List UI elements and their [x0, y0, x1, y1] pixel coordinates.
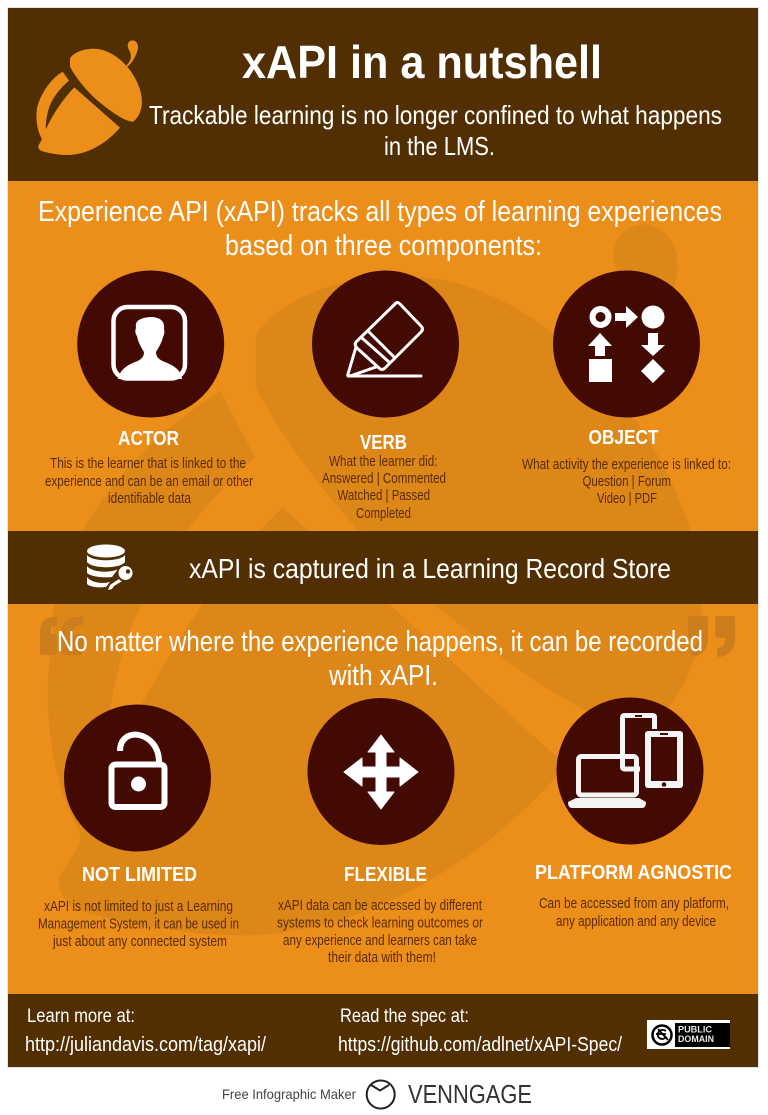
intro heading: [38, 196, 722, 262]
panel: object: [522, 270, 731, 507]
heading: verb: VERB: [360, 432, 407, 454]
text: spec link: Read the spec at:: [340, 1006, 469, 1027]
icon: public domain badge: [647, 1020, 730, 1049]
text: learn more link: http://juliandavis.com/tag/xapi/: [25, 1034, 266, 1056]
panel: not limited: [38, 704, 239, 950]
text: verb description: [322, 454, 446, 522]
text: object description: Question | Forum: [582, 474, 671, 490]
text: flexible description: any experience and learners can take: [283, 933, 477, 949]
text: verb description: Watched | Passed: [338, 488, 430, 504]
heading: platform agnostic: PLATFORM AGNOSTIC: [535, 862, 732, 884]
band: learning record store: [8, 531, 758, 604]
footer band: [8, 994, 758, 1067]
icon: acorn: [36, 40, 142, 155]
quote heading: [57, 626, 703, 692]
text: platform agnostic description: Can be accessed from any platform,: [539, 896, 729, 912]
text: object description: [522, 457, 731, 507]
text: learn more link: Learn more at:: [27, 1006, 135, 1027]
text: actor description: This is the learner that is linked to the: [50, 456, 246, 472]
text: not limited description: just about any connected system: [52, 934, 227, 950]
text: band caption: xAPI is captured in a Learning Record Store: [189, 553, 671, 584]
panel: platform agnostic: [535, 698, 732, 930]
text: verb description: Completed: [356, 506, 411, 522]
text: verb description: Answered | Commented: [322, 471, 446, 487]
icon: opening quote mark: [40, 617, 83, 655]
icon: laptop and phones: [556, 698, 704, 844]
icon: public domain badge: PUBLIC: [678, 1024, 712, 1036]
text: learn more link: [25, 1006, 266, 1056]
icon: actor portrait: [77, 270, 224, 418]
text: spec link: https://github.com/adlnet/xAPI-Spec/: [338, 1034, 622, 1056]
text: not limited description: xAPI is not limited to just a Learning: [44, 899, 233, 915]
text: flexible description: their data with them!: [328, 950, 436, 966]
icon: marker pencil: [312, 270, 459, 418]
icon: object flow diagram: [553, 270, 700, 418]
icon: public domain badge: DOMAIN: [678, 1034, 714, 1045]
title: xAPI in a nutshell: [242, 36, 602, 88]
text: not limited description: [38, 899, 239, 950]
heading: flexible: FLEXIBLE: [344, 864, 427, 886]
subtitle: in the LMS.: [384, 131, 495, 161]
icon: venngage logo: [367, 1080, 395, 1108]
text: flexible description: [277, 898, 483, 966]
panel: orange background: [8, 181, 758, 994]
text: spec link: [338, 1006, 622, 1056]
heading: not limited: NOT LIMITED: [82, 864, 197, 886]
icon: database with key: [87, 544, 134, 590]
heading: actor: ACTOR: [118, 428, 179, 450]
watermark acorn: [48, 225, 702, 935]
panel: verb: [312, 270, 459, 522]
text: venngage wordmark: VENNGAGE: [408, 1079, 532, 1109]
text: platform agnostic description: [539, 896, 729, 930]
header band: [8, 8, 758, 181]
text: free infographic maker: Free Infographic Maker: [222, 1086, 356, 1102]
heading: object: OBJECT: [588, 427, 658, 449]
icon: open padlock: [64, 704, 211, 852]
text: actor description: [45, 456, 253, 507]
text: not limited description: Management System, it can be used in: [38, 916, 239, 932]
venngage attribution: [222, 1079, 532, 1109]
panel: actor: [45, 270, 253, 507]
subtitle: [149, 100, 722, 161]
text: flexible description: xAPI data can be accessed by different: [278, 898, 482, 914]
icon: closing quote mark: [688, 616, 735, 657]
text: flexible description: systems to check learning outcomes or: [277, 916, 483, 932]
text: actor description: experience and can be an email or other: [45, 474, 253, 490]
intro heading: based on three components:: [225, 230, 542, 262]
text: actor description: identifiable data: [108, 491, 192, 507]
text: object description: Video | PDF: [597, 491, 657, 507]
icon: four-way move arrows: [308, 698, 454, 845]
text: platform agnostic description: any application and any device: [556, 914, 716, 930]
quote heading: with xAPI.: [328, 660, 438, 692]
panel: flexible: [277, 698, 483, 966]
text: verb description: What the learner did:: [329, 454, 438, 470]
